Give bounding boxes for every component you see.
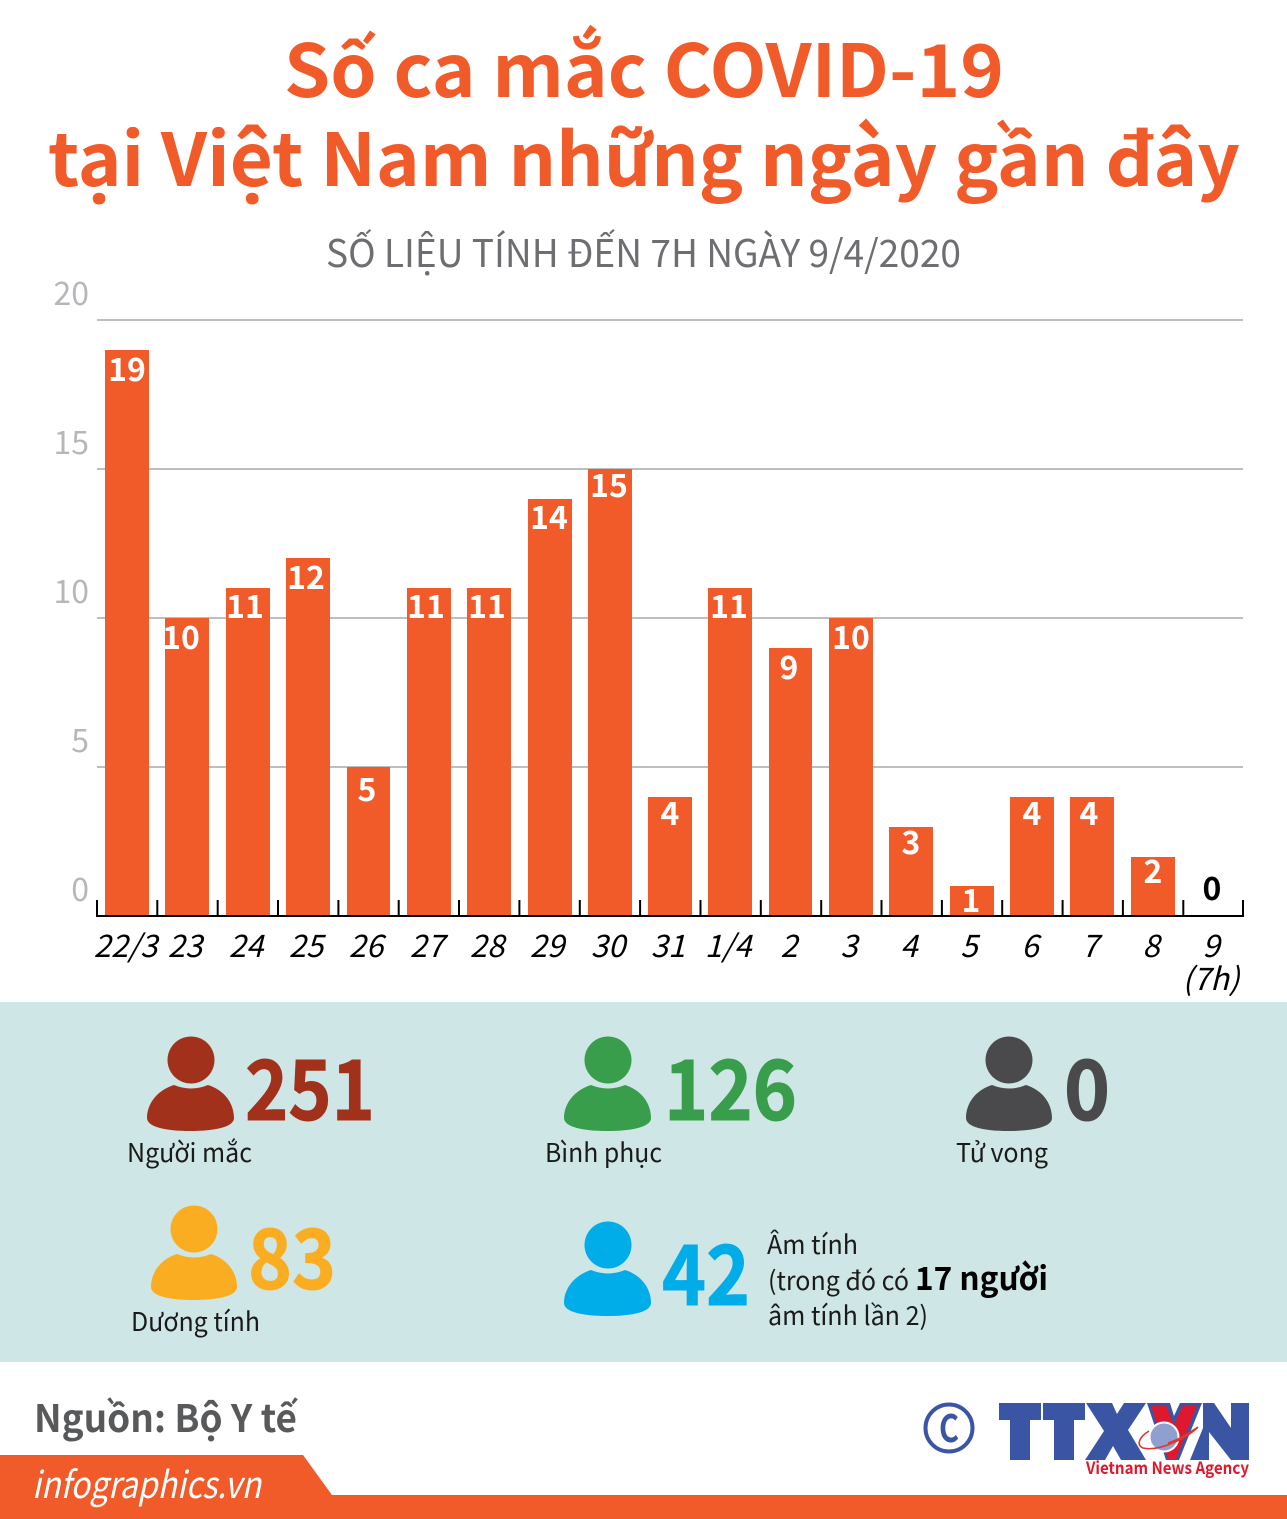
- website: infographics.vn: [32, 1455, 262, 1509]
- x axis: [96, 900, 1244, 916]
- logo: TTXVN: Vietnam News Agency: [1085, 1454, 1249, 1479]
- stat: âm tính: [564, 1209, 1048, 1333]
- x axis labels: 8: [1142, 921, 1162, 966]
- bar value labels: 5: [358, 765, 376, 811]
- x axis labels: [94, 921, 1241, 999]
- stat: âm tính: Âm tính: [767, 1225, 858, 1262]
- title: Số ca mắc COVID-19: [284, 13, 1004, 119]
- x axis labels: (7h): [1183, 954, 1241, 999]
- y axis labels: 0: [71, 865, 89, 911]
- bar value labels: 1: [962, 876, 980, 922]
- bar value labels: 2: [1144, 847, 1162, 893]
- stat: âm tính: 42: [662, 1209, 750, 1329]
- subtitle: SỐ LIỆU TÍNH ĐẾN 7H NGÀY 9/4/2020: [326, 223, 961, 278]
- stat: bình phục: Bình phục: [545, 1133, 662, 1170]
- x axis labels: 7: [1081, 921, 1103, 966]
- x axis labels: 28: [470, 921, 507, 966]
- bar value labels: 15: [590, 461, 628, 507]
- panel: statistics: [0, 1002, 1287, 1362]
- bar value labels: 14: [530, 493, 568, 539]
- bar value labels: [108, 345, 1221, 922]
- x axis labels: 4: [900, 921, 919, 966]
- x axis labels: 26: [349, 921, 387, 966]
- x axis labels: 31: [651, 921, 685, 966]
- bar value labels: 4: [1080, 789, 1098, 835]
- icon: copyright: [926, 1398, 972, 1453]
- stat: tử vong: [956, 1024, 1110, 1170]
- bar value labels: 19: [108, 345, 146, 391]
- x axis labels: 24: [229, 921, 265, 966]
- bar value labels: 11: [468, 582, 506, 628]
- stat: người mắc: 251: [245, 1024, 375, 1144]
- x axis labels: 6: [1021, 921, 1042, 966]
- y axis labels: 10: [53, 567, 89, 613]
- bar value labels: 4: [661, 789, 679, 835]
- stat: bình phục: 126: [664, 1024, 797, 1144]
- bar value labels: 0: [1203, 864, 1221, 910]
- stat: âm tính: 17 người: [915, 1254, 1048, 1300]
- x axis labels: 5: [960, 921, 980, 966]
- bar value labels: 11: [710, 582, 748, 628]
- y axis labels: 20: [53, 269, 89, 315]
- stat: dương tính: 83: [248, 1193, 336, 1313]
- stat: tử vong: Tử vong: [956, 1133, 1048, 1170]
- x axis labels: 9: [1202, 921, 1223, 966]
- stat: âm tính: âm tính lần 2): [768, 1296, 928, 1333]
- x axis labels: 3: [840, 921, 860, 966]
- logo: TTXVN: [999, 1403, 1249, 1479]
- bar value labels: 12: [287, 553, 325, 599]
- y axis labels: 15: [53, 418, 89, 464]
- x axis labels: 23: [168, 921, 205, 966]
- stat: bình phục: [545, 1024, 797, 1170]
- y axis labels: 5: [71, 716, 89, 762]
- stat: tử vong: 0: [1064, 1024, 1110, 1144]
- source: Nguồn: Bộ Y tế: [34, 1388, 298, 1443]
- bar chart: [53, 269, 1244, 999]
- x axis labels: 27: [410, 921, 449, 966]
- bar value labels: 10: [162, 613, 200, 659]
- x axis labels: 29: [530, 921, 568, 966]
- bar value labels: 11: [226, 582, 264, 628]
- x axis labels: 30: [591, 921, 629, 966]
- bars: [105, 350, 1175, 916]
- stat: âm tính: (trong đó có: [768, 1261, 909, 1298]
- x axis labels: 1/4: [705, 921, 753, 966]
- bar value labels: 10: [832, 613, 870, 659]
- bar value labels: 11: [407, 582, 445, 628]
- footer band: [0, 1455, 1287, 1519]
- stat: người mắc: [127, 1024, 375, 1170]
- bar value labels: 9: [780, 643, 798, 689]
- x axis labels: 22/3: [94, 921, 160, 966]
- stat: dương tính: [131, 1193, 336, 1339]
- stat: dương tính: Dương tính: [131, 1302, 260, 1339]
- x axis labels: 25: [289, 921, 326, 966]
- title: [48, 13, 1240, 208]
- bar value labels: 4: [1023, 789, 1041, 835]
- stat: người mắc: Người mắc: [127, 1133, 252, 1170]
- x axis labels: 2: [780, 921, 800, 966]
- icon: copyright: C: [939, 1398, 959, 1453]
- bar value labels: 3: [902, 818, 920, 864]
- y axis labels: [53, 269, 89, 911]
- title: tại Việt Nam những ngày gần đây: [48, 102, 1240, 208]
